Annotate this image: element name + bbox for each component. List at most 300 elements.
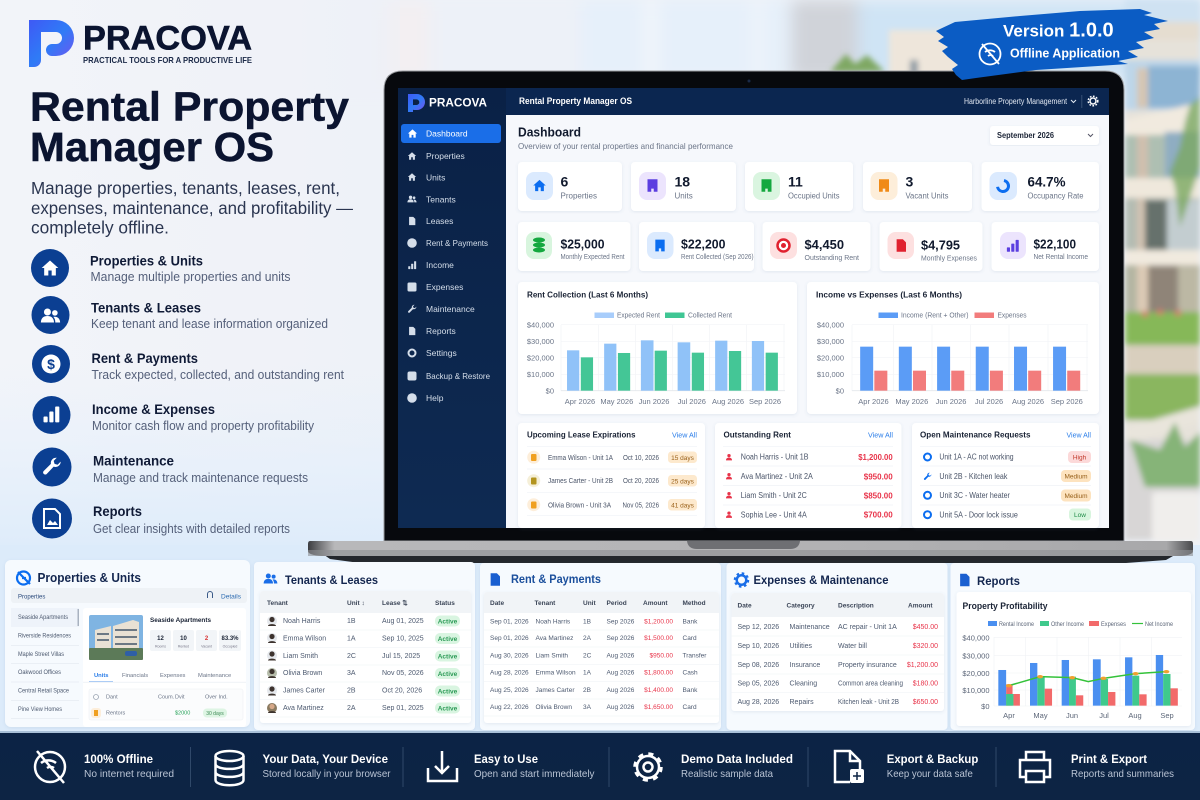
panel: properties and units [5,560,250,727]
feature: your data [216,751,391,785]
property list: Maple Street Villas [18,651,64,658]
panel: reports [950,563,1195,730]
version badge [936,9,1168,80]
property stats: Vacant [201,644,212,648]
panel: upcoming lease expirations [518,423,705,528]
feature: demo data [635,752,793,780]
header bar: Details [221,594,241,600]
payments table: $1,500.00 [644,635,673,642]
panel: open maintenance requests: Open Maintenance Requests [920,430,1031,440]
subtitle: completely offline. [31,218,169,238]
expenses table: Date [738,603,752,610]
sidebar logo [408,94,425,112]
card: occupancy rate [982,162,1099,211]
panel: upcoming lease expirations: Upcoming Lease Expirations [527,430,636,440]
chart: income vs expenses: $0 [836,386,844,396]
card: rent collected [639,222,754,271]
sidebar brand: PRACOVA [429,96,487,110]
feature: maintenance: Maintenance [93,453,174,469]
mini table: Dant [106,694,118,700]
card: properties: Properties [560,192,597,200]
status pills: Active [438,636,458,643]
heading: Rent & Payments [511,572,601,586]
expenses table: AC repair - Unit 1A [838,624,897,631]
feature: rent and payments: $ [47,356,55,372]
maintenance rows: Unit 5A - Door lock issue [939,510,1018,520]
x axis: May [1033,711,1048,720]
laptop base [308,541,1193,563]
lease rows: 41 days [671,502,695,510]
expenses table: $320.00 [913,643,938,650]
expenses table: Category [786,603,815,610]
dashboard heading: Overview of your rental properties and financial performance [518,141,733,151]
expenses table: $650.00 [913,699,938,706]
axes [561,325,785,391]
tenant rows: 3A [347,670,356,677]
payments table: 3A [583,704,592,711]
offline application label: Offline Application [1010,46,1120,60]
tenant rows: Sep 01, 2025 [382,705,424,712]
chart: income vs expenses: $20,000 [817,354,844,362]
chart legend: Expenses [998,310,1027,320]
outstanding rows: $700.00 [864,511,893,520]
legend: Expenses [1101,622,1126,628]
feature: your data: Stored locally in your browser [262,768,391,780]
feature: tenants and leases [32,296,328,334]
card: monthly expected rent [518,222,630,271]
payments table: Unit [583,600,596,607]
mini table: Rentors [106,710,126,716]
tabs: Financials [122,673,148,679]
x axis: Aug [1128,711,1142,720]
feature: tenants and leases: Tenants & Leases [91,300,201,316]
status pills: Active [438,654,458,660]
expenses table: Maintenance [790,624,830,631]
x axis: Jun [1066,711,1078,720]
expenses table: $180.00 [913,680,938,688]
chart: income vs expenses: Jun 2026 [936,397,966,406]
feature: easy to use: Easy to Use [474,752,538,766]
status pills [435,616,460,714]
tabs: Expenses [160,673,186,679]
feature: print and export: Reports and summaries [1071,768,1174,780]
card: monthly expenses: $4,795 [921,238,960,252]
panel: rent and payments [480,563,721,730]
chart: rent collection: Rent Collection (Last 6 Months) [527,290,648,300]
feature: reports: Get clear insights with detailed reports [93,522,290,536]
chart: income vs expenses: Income vs Expenses (Last 6 Months) [816,290,962,300]
payments table [484,592,719,723]
tenant rows: 1B [347,618,356,625]
payments table: $950.00 [650,652,673,660]
chart: rent collection: $20,000 [527,354,554,362]
chart: rent collection: Sep 2026 [749,397,781,406]
maintenance rows: High [1073,454,1087,462]
property detail card [83,608,246,727]
feature: income and expenses: Monitor cash flow and property profitability [92,419,315,433]
payments table: Aug 25, 2026 [490,687,529,694]
tenant rows: Sep 10, 2025 [382,636,424,642]
outstanding rows [726,453,893,520]
feature: offline: No internet required [84,768,174,780]
tenant rows: James Carter [283,688,326,694]
feature: rent and payments: Track expected, collected, and outstanding rent [92,368,344,382]
payments table: Card [682,635,697,642]
grid [994,637,1182,706]
payments table: Sep 01, 2026 [490,635,529,642]
expenses table [732,593,944,711]
lease rows: 15 days [671,455,695,462]
y axis [962,634,990,711]
chart: income vs expenses: Apr 2026 [858,397,889,406]
panel: outstanding rent [715,423,902,528]
property stats: 10 [180,636,187,642]
outstanding rows: $950.00 [864,472,893,481]
tagline: PRACTICAL TOOLS FOR A PRODUCTIVE LIFE [83,55,252,65]
maintenance rows [924,451,1091,520]
panel: outstanding rent: View All [868,430,893,440]
feature: income and expenses [32,396,315,434]
payments table: 1A [583,670,592,676]
chart: income vs expenses: Jul 2026 [975,397,1003,406]
sidebar [398,88,506,528]
icon: gear [735,574,748,586]
maintenance rows: Unit 3C - Water heater [939,491,1010,500]
payments table: Aug 2026 [606,704,635,711]
payments table: Sep 01, 2026 [490,618,529,625]
chart legend: Income (Rent + Other) [901,310,969,320]
chart: rent collection: Aug 2026 [712,397,744,406]
property photo [89,615,143,660]
header bar: Properties [18,594,45,600]
payments table: Bank [682,618,698,625]
sidebar menu: Units [426,172,445,182]
y axis: $30,000 [962,652,990,660]
month selector: September 2026 [997,131,1055,140]
payments table: Aug 2026 [606,687,635,694]
expenses table: Sep 12, 2026 [738,624,779,631]
heading: Properties & Units [38,570,141,585]
property stats: 83.3% [221,636,239,642]
expenses table: Insurance [790,662,820,669]
icon: properties [17,572,30,584]
payments table: 2C [583,652,592,660]
chart: income vs expenses: Sep 2026 [1051,397,1083,406]
tenant rows: 2B [347,688,356,694]
lease rows: Emma Wilson - Unit 1A [548,455,613,462]
payments table: $1,400.00 [644,687,673,694]
outstanding rows: Sophia Lee - Unit 4A [741,510,807,520]
icon: tenants [264,574,277,584]
card: monthly expected rent: Monthly Expected Rent [560,254,625,261]
property list: Seaside Apartments [18,614,68,621]
lease rows: 25 days [671,478,695,486]
property list: Pine View Homes [18,706,62,713]
chart legend [594,310,733,320]
payments table: Aug 2026 [606,670,635,676]
tenant table: Tenant [267,600,289,607]
y axis: $10,000 [962,686,990,695]
payments table: Method [682,600,706,607]
feature: export and backup: Keep your data safe [887,768,973,780]
feature: demo data: Demo Data Included [681,752,793,766]
sidebar menu: Backup & Restore [426,371,490,381]
bars [567,340,778,391]
feature: your data: Your Data, Your Device [262,752,388,766]
heading: Tenants & Leases [285,573,378,587]
payments table: Date [490,600,504,607]
sidebar menu: Expenses [426,282,463,292]
card: monthly expenses: Monthly Expenses [921,254,977,262]
panel: tenants and leases [254,562,475,730]
tenant rows: Noah Harris [283,618,321,625]
expenses table: Sep 08, 2026 [738,662,779,669]
chart: rent collection: $40,000 [527,320,554,330]
card: units: 18 [674,174,690,190]
lease rows: Oct 20, 2026 [623,478,659,485]
chart: rent collection: $30,000 [527,337,554,346]
outstanding rows: $850.00 [864,491,893,500]
chart: rent collection: Jun 2026 [639,397,669,406]
subtitle [31,178,353,238]
card: rent collected: Rent Collected (Sep 2026) [681,254,754,261]
mini table: Dvit [175,694,185,700]
payments table: Transfer [682,652,707,660]
chart: rent collection: May 2026 [600,397,633,406]
chart: rent collection: $10,000 [527,370,554,379]
dividers [190,747,996,787]
feature: properties and units [31,249,290,287]
logo mark [29,20,74,67]
tenant rows: 1A [347,636,356,642]
mini table: 30 days [206,711,224,717]
card: units: Units [674,192,693,200]
month selector [990,126,1099,145]
lease rows: Oct 10, 2026 [623,455,659,462]
sidebar menu: Settings [426,348,457,358]
tenant rows: Nov 05, 2026 [382,670,424,677]
feature: export and backup: Export & Backup [887,752,978,766]
sidebar menu: Rent & Payments [426,238,488,248]
profitability chart card: Property Profitability [962,601,1048,612]
top bar: Harborline Property Management [964,97,1068,106]
chart: income vs expenses: May 2026 [895,397,928,406]
tabs: Maintenance [198,673,231,679]
payments table: Cash [682,670,698,676]
title: Manager OS [30,124,274,170]
sidebar menu: Maintenance [426,304,475,314]
payments table: Sep 2026 [606,635,635,642]
mini table: Over Ind. [205,694,228,700]
laptop [308,71,1193,563]
payments table: Aug 22, 2026 [490,704,529,711]
payments table: Card [682,704,697,711]
camera [748,80,750,82]
tenant table: Unit ↕ [347,600,365,607]
property stats: 12 [157,636,164,642]
chart: income vs expenses [807,282,1099,414]
card: properties [518,162,622,211]
sidebar menu: Leases [426,216,453,226]
sidebar menu: Income [426,260,454,270]
payments table: $1,200.00 [644,618,673,625]
payments table: $1,650.00 [644,704,673,711]
legend: Other Income [1051,622,1085,628]
logo [29,20,252,67]
expenses table: Sep 10, 2026 [738,643,779,650]
card: properties: 6 [560,174,568,190]
maintenance rows: Low [1074,512,1086,519]
y axis: $20,000 [962,669,990,678]
property stats: Rented [178,644,189,648]
outstanding rows: Ava Martinez - Unit 2A [741,472,813,481]
maintenance rows: Medium [1064,493,1088,500]
card: occupied units: Occupied Units [788,192,840,200]
expenses table: Kitchen leak - Unit 2B [838,699,899,706]
tenant table: Lease ⇅ [382,599,408,607]
chart legend [878,310,1027,320]
chart: income vs expenses: $10,000 [817,370,844,379]
expenses table: Sep 05, 2026 [738,680,779,688]
card: monthly expenses [880,222,982,271]
feature: print and export [1020,752,1174,782]
status pills: Active [438,618,458,626]
title [30,84,349,170]
payments table: 2A [583,635,592,642]
feature: rent and payments [32,345,344,383]
avatars [267,616,277,713]
feature: offline: 100% Offline [84,752,153,766]
screen background [398,88,1109,528]
card: vacant units: 3 [906,174,914,190]
panel: open maintenance requests: View All [1066,430,1091,440]
panel: open maintenance requests [912,423,1099,528]
feature: print and export: Print & Export [1071,752,1147,766]
card: occupancy rate: Occupancy Rate [1028,192,1084,200]
card: vacant units: Vacant Units [906,192,948,200]
stat cards row 2 [518,222,1099,271]
outstanding rows: $1,200.00 [858,453,893,462]
tenant rows: Oct 20, 2026 [382,688,422,694]
x axis: Apr [1003,711,1015,720]
payments table: Emma Wilson [536,670,576,676]
dashboard heading [518,124,733,151]
feature: maintenance [32,448,308,486]
feature: income and expenses: Income & Expenses [92,401,215,417]
property detail card: Seaside Apartments [150,617,211,624]
expenses table: Description [838,603,874,610]
x axis: Jul [1099,711,1109,720]
status pills: Active [438,688,458,696]
sidebar menu: Properties [426,151,465,161]
expenses table: Aug 28, 2026 [738,699,779,706]
expenses table: Amount [908,603,933,610]
card: vacant units [863,162,972,211]
payments table: Liam Smith [536,652,568,660]
payments table: Noah Harris [536,618,571,625]
card: occupancy rate: 64.7% [1028,174,1066,190]
chart: rent collection [518,282,797,414]
payments table: Aug 30, 2026 [490,652,529,660]
lease rows: James Carter - Unit 2B [548,478,613,485]
feature: reports: Reports [93,503,142,519]
tenant rows [283,618,424,712]
card: outstanding rent: Outstanding Rent [804,253,860,262]
expenses table: Property insurance [838,662,897,669]
tenant rows: Emma Wilson [283,636,326,642]
payments table: James Carter [536,687,575,694]
property list: Central Retail Space [18,688,70,695]
lease rows [527,451,697,511]
y axis: $40,000 [962,634,990,642]
laptop lid bezel [384,71,1124,541]
status pills: Active [438,706,458,712]
payments table: Period [606,600,627,607]
card: net rental income: Net Rental Income [1034,254,1088,261]
axes [852,325,1088,391]
feature: demo data: Realistic sample data [681,768,773,780]
sidebar menu [407,151,490,403]
chart: rent collection: Apr 2026 [565,397,595,406]
feature: export and backup [835,751,978,783]
active item: dashboard [401,124,501,143]
chart: rent collection: Jul 2026 [678,397,706,406]
chart legend: Expected Rent [617,310,661,320]
maintenance rows: Unit 1A - AC not working [939,453,1014,462]
card: net rental income: $22,100 [1034,236,1076,252]
feature: reports [32,498,290,538]
bottom feature band [0,731,1200,800]
maintenance rows: Medium [1064,474,1088,480]
panel: expenses and maintenance [726,563,948,730]
sidebar menu: Reports [426,326,456,336]
property list: Riverside Residences [18,633,71,640]
feature: properties and units: Properties & Units [90,253,203,269]
property stats [150,630,241,651]
title: Rental Property [30,84,349,130]
mini table [89,689,243,720]
feature: properties and units: Manage multiple properties and units [90,270,290,284]
y axis: $0 [981,702,990,711]
tabs [83,673,246,682]
icon: offline [980,44,1000,64]
feature: offline [35,751,174,783]
chart: income vs expenses: $30,000 [817,337,844,346]
outstanding rows: Liam Smith - Unit 2C [741,491,807,500]
tenant rows: Ava Martinez [283,705,324,712]
feature: rent and payments: Rent & Payments [92,350,198,366]
lease rows: Olivia Brown - Unit 3A [548,502,611,510]
heading: Expenses & Maintenance [754,573,889,587]
dashboard heading: Dashboard [518,124,581,140]
feature: easy to use [428,751,595,781]
icon: rent [491,573,500,586]
version text: Version 1.0.0 [1003,20,1114,42]
subtitle: expenses, maintenance, and profitability — [31,198,353,218]
feature: maintenance: Manage and track maintenance requests [93,471,308,485]
chart: income vs expenses: Aug 2026 [1012,397,1044,406]
payments table: 2B [583,687,591,694]
tenant rows: Aug 01, 2025 [382,618,424,625]
tenant rows: Jul 15, 2025 [382,653,420,660]
mini table: $2000 [175,710,190,716]
card: rent collected: $22,200 [681,236,726,252]
expenses table: Common area cleaning [838,680,903,688]
legend [988,621,1174,628]
legend: Rental Income [999,622,1035,628]
payments table: Ava Martinez [536,635,573,642]
payments table: Tenant [534,600,556,607]
